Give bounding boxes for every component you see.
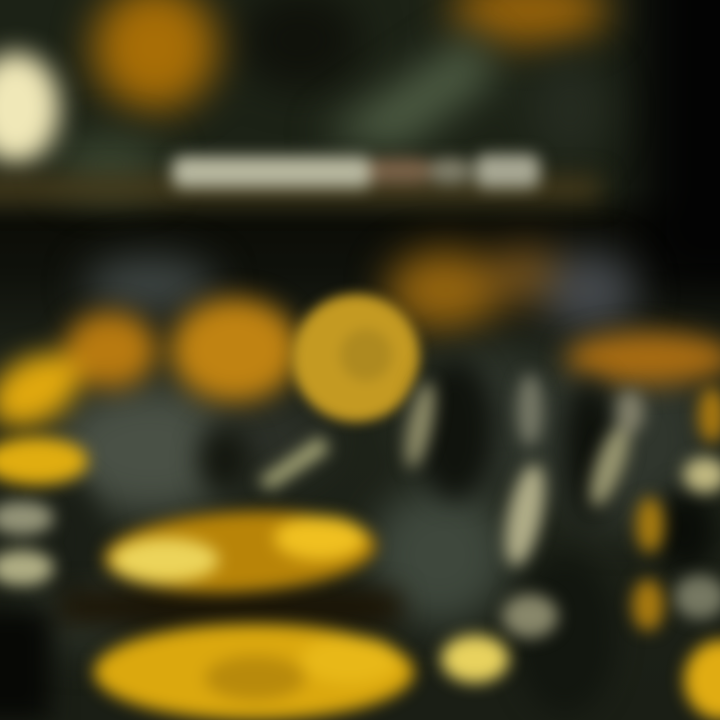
green diagonal streak (55, 35, 610, 195)
distant coins (84, 247, 636, 332)
blurred headline band (172, 154, 540, 188)
top orange glow (93, 0, 608, 110)
orange coin row (0, 298, 720, 442)
large yellow coin, middle (102, 505, 378, 599)
mid grey-green stacks (30, 350, 710, 650)
small amber accents (632, 387, 720, 631)
pale coin edges (0, 374, 720, 638)
brown shelf line (0, 178, 600, 200)
dark right column (640, 0, 720, 290)
small pale yellow coin (441, 635, 509, 683)
yellow coin, left edge (0, 437, 88, 485)
central gold coin (292, 294, 420, 422)
dark stack shadows (40, 360, 715, 715)
dark shadows under coins (0, 592, 400, 720)
cream blob, left (0, 52, 60, 164)
large yellow coin, bottom (94, 624, 414, 720)
yellow coin, bottom right (684, 640, 720, 720)
